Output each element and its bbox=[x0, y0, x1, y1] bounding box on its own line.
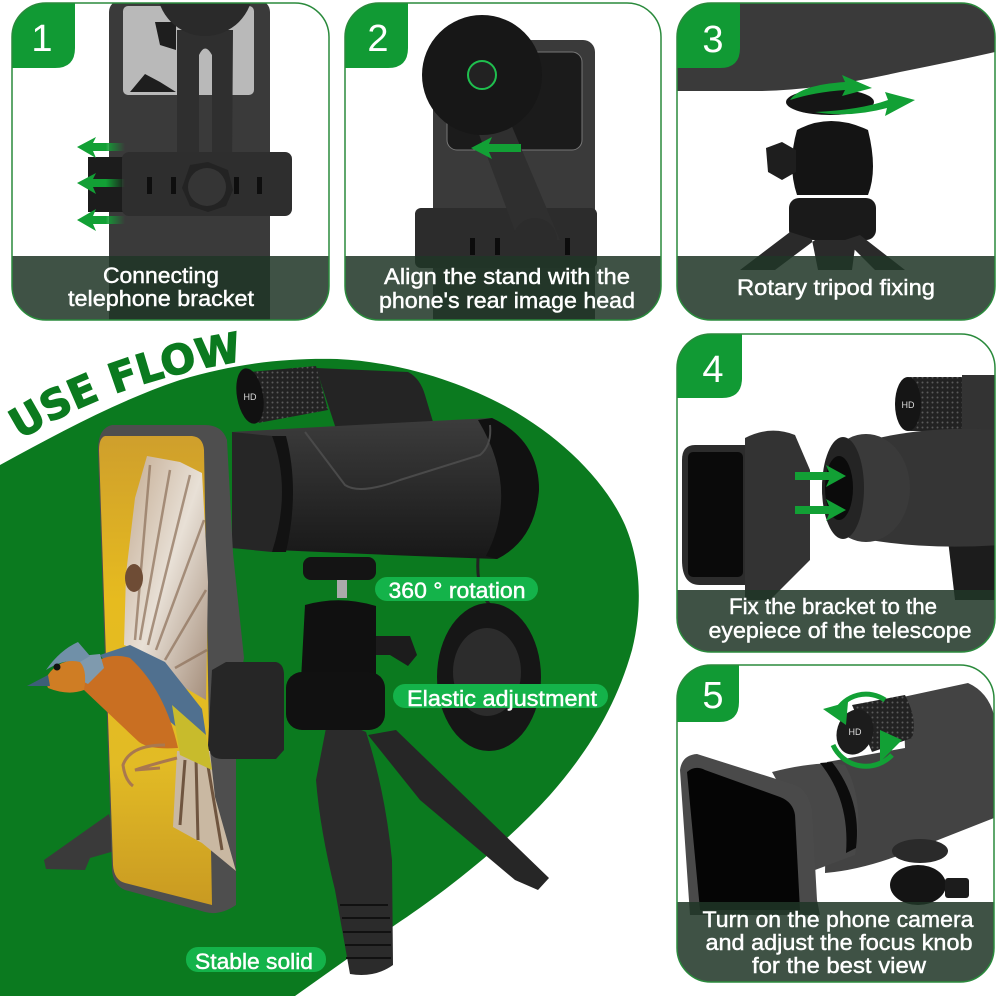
panel: step 1 bbox=[12, 0, 329, 330]
caption 5: Turn on the phone camera bbox=[702, 907, 974, 932]
wing shoulder bbox=[125, 564, 143, 592]
panel border 5 bbox=[677, 665, 994, 982]
focus knob bbox=[852, 695, 914, 752]
arrow 4 bottom bbox=[795, 499, 846, 521]
panel: step 2 bbox=[345, 3, 661, 330]
phone back bbox=[433, 40, 595, 330]
side knob bbox=[376, 636, 417, 666]
lens cap bbox=[437, 603, 541, 751]
caption band bbox=[677, 590, 995, 652]
panel border 3 bbox=[677, 3, 995, 320]
right tripod leg bbox=[368, 730, 549, 890]
bracket arms bbox=[177, 30, 233, 152]
pill text: Elastic adjustment bbox=[407, 686, 597, 711]
tripod ball head bbox=[890, 865, 946, 905]
mount disc bbox=[892, 839, 948, 863]
camera reflections bbox=[130, 22, 176, 92]
heading: use flow: USE FLOW bbox=[8, 330, 237, 435]
pill text: 360 ° rotation bbox=[388, 578, 526, 603]
tripod legs bbox=[740, 232, 905, 270]
number 2: 2 bbox=[367, 18, 389, 60]
leg grip ridges bbox=[340, 905, 391, 958]
bracket arm bbox=[480, 127, 546, 208]
crown bbox=[46, 642, 90, 670]
ball head bbox=[792, 121, 873, 195]
caption 4: eyepiece of the telescope bbox=[708, 618, 972, 643]
illustration: monocular and tripod bbox=[44, 366, 549, 975]
front tripod leg bbox=[316, 726, 393, 975]
mount disc bbox=[786, 89, 874, 115]
focus knob bbox=[905, 377, 971, 431]
upper arc bbox=[836, 694, 885, 712]
tripod mount disc bbox=[303, 557, 376, 580]
pill bbox=[375, 577, 538, 601]
disc center bbox=[468, 61, 496, 89]
lens cap inner bbox=[453, 628, 521, 716]
left knob bbox=[766, 142, 796, 180]
stem bbox=[337, 580, 347, 598]
holder bbox=[745, 431, 810, 600]
number tab bbox=[677, 334, 742, 398]
knob bbox=[513, 218, 557, 262]
neck blue-gray bbox=[80, 654, 104, 684]
eyepiece ring bbox=[772, 764, 858, 870]
eyepiece lens bbox=[822, 437, 864, 539]
lower bracket bbox=[415, 208, 597, 268]
lens strap bbox=[478, 558, 490, 605]
beak bbox=[27, 675, 50, 686]
knob cap bbox=[831, 705, 879, 759]
ball head bbox=[301, 600, 376, 680]
caption 5: for the best view bbox=[752, 953, 926, 978]
eyepiece dark band bbox=[272, 436, 293, 552]
clamp block bbox=[208, 662, 284, 759]
slider clamp bbox=[88, 157, 122, 212]
knob label: HD bbox=[848, 727, 862, 737]
panel border 4 bbox=[677, 334, 995, 652]
phone housing bbox=[98, 425, 244, 913]
number tab bbox=[677, 665, 739, 722]
lens opening bbox=[825, 456, 853, 520]
number 5: 5 bbox=[702, 675, 724, 717]
number 4: 4 bbox=[702, 349, 724, 391]
lower back yellow bbox=[172, 705, 212, 770]
collar bbox=[789, 198, 876, 240]
label: stable solid bbox=[186, 947, 326, 974]
arrow 4 top bbox=[795, 465, 846, 487]
end ring bbox=[478, 418, 539, 559]
phone screen bbox=[99, 436, 212, 905]
camera module bbox=[447, 52, 582, 150]
mount bbox=[962, 375, 1000, 435]
caption band bbox=[677, 256, 995, 320]
lower arc bbox=[833, 745, 892, 766]
black ring bbox=[820, 762, 857, 853]
caption 1: Connecting bbox=[103, 263, 219, 288]
bird back blue bbox=[100, 645, 206, 735]
slider bar bbox=[122, 152, 292, 216]
caption 4: Fix the bracket to the bbox=[729, 594, 937, 619]
caption 2: phone's rear image head bbox=[379, 288, 635, 313]
collar bbox=[286, 672, 385, 730]
eye bbox=[54, 664, 60, 670]
back tripod leg bbox=[44, 814, 118, 870]
telescope body bbox=[870, 429, 1000, 547]
panel border 2 bbox=[345, 3, 661, 320]
knob dome bbox=[188, 168, 226, 206]
number tab bbox=[345, 3, 408, 68]
caption 5: and adjust the focus knob bbox=[706, 930, 972, 955]
mount disc bbox=[422, 15, 542, 135]
caption band bbox=[12, 256, 329, 320]
panel: step 4 bbox=[677, 334, 1000, 652]
knob cap bbox=[895, 377, 921, 431]
rotation arrows bbox=[790, 75, 915, 116]
phone back bbox=[109, 0, 270, 330]
eyepiece bbox=[822, 434, 910, 542]
ring arrowheads bbox=[823, 702, 902, 762]
arrow 1 bottom bbox=[77, 209, 125, 231]
phone bbox=[682, 445, 745, 585]
telescope body bbox=[232, 418, 539, 559]
green focus ring bbox=[833, 694, 892, 766]
panel: step 5 bbox=[677, 665, 994, 982]
tripod knob bbox=[945, 878, 969, 898]
panel: step 3 bbox=[677, 0, 995, 320]
head bbox=[45, 660, 85, 693]
label: 360 rotation bbox=[375, 577, 538, 603]
knob cap bbox=[232, 366, 268, 426]
slider slots bbox=[147, 177, 262, 194]
legs bbox=[123, 745, 177, 786]
number 3: 3 bbox=[702, 19, 724, 61]
illustration: bird bbox=[27, 456, 236, 871]
caption 3: Rotary tripod fixing bbox=[737, 275, 935, 300]
tripod head below bbox=[948, 540, 995, 600]
phone housing bbox=[680, 754, 820, 915]
wing fan bbox=[124, 456, 208, 700]
telescope body and mount bbox=[825, 683, 994, 873]
number 1: 1 bbox=[31, 18, 53, 60]
caption band bbox=[345, 256, 661, 320]
bird body bbox=[82, 656, 178, 748]
telescope body bbox=[677, 0, 995, 91]
phone screen bbox=[688, 452, 743, 577]
bracket slots bbox=[470, 238, 570, 255]
green background blob bbox=[0, 359, 639, 996]
panel border 1 bbox=[12, 3, 329, 320]
body grip highlight bbox=[305, 425, 490, 489]
knob label: HD bbox=[902, 400, 915, 410]
caption 2: Align the stand with the bbox=[384, 264, 630, 289]
tail bbox=[173, 751, 236, 871]
caption band bbox=[677, 902, 994, 982]
pill text: Stable solid bbox=[195, 949, 313, 974]
arrow 2 bbox=[471, 137, 521, 159]
telescope mount bbox=[316, 368, 436, 432]
wing feathers bbox=[135, 465, 207, 668]
focus knob bbox=[250, 366, 328, 423]
phone screen bbox=[687, 768, 800, 910]
pill bbox=[393, 684, 608, 708]
caption 1: telephone bracket bbox=[68, 286, 254, 311]
pill bbox=[186, 947, 326, 972]
camera glass bbox=[123, 6, 254, 95]
tail streaks bbox=[180, 758, 222, 850]
arrow 1 top bbox=[77, 137, 125, 158]
bracket disc bbox=[160, 4, 250, 30]
eyepiece section bbox=[232, 432, 282, 552]
number tab bbox=[677, 3, 740, 68]
knob label: HD bbox=[244, 392, 257, 402]
number tab bbox=[12, 3, 75, 68]
knob bbox=[182, 162, 233, 212]
label: elastic adjustment bbox=[393, 684, 608, 711]
arrow 1 middle bbox=[77, 173, 125, 194]
